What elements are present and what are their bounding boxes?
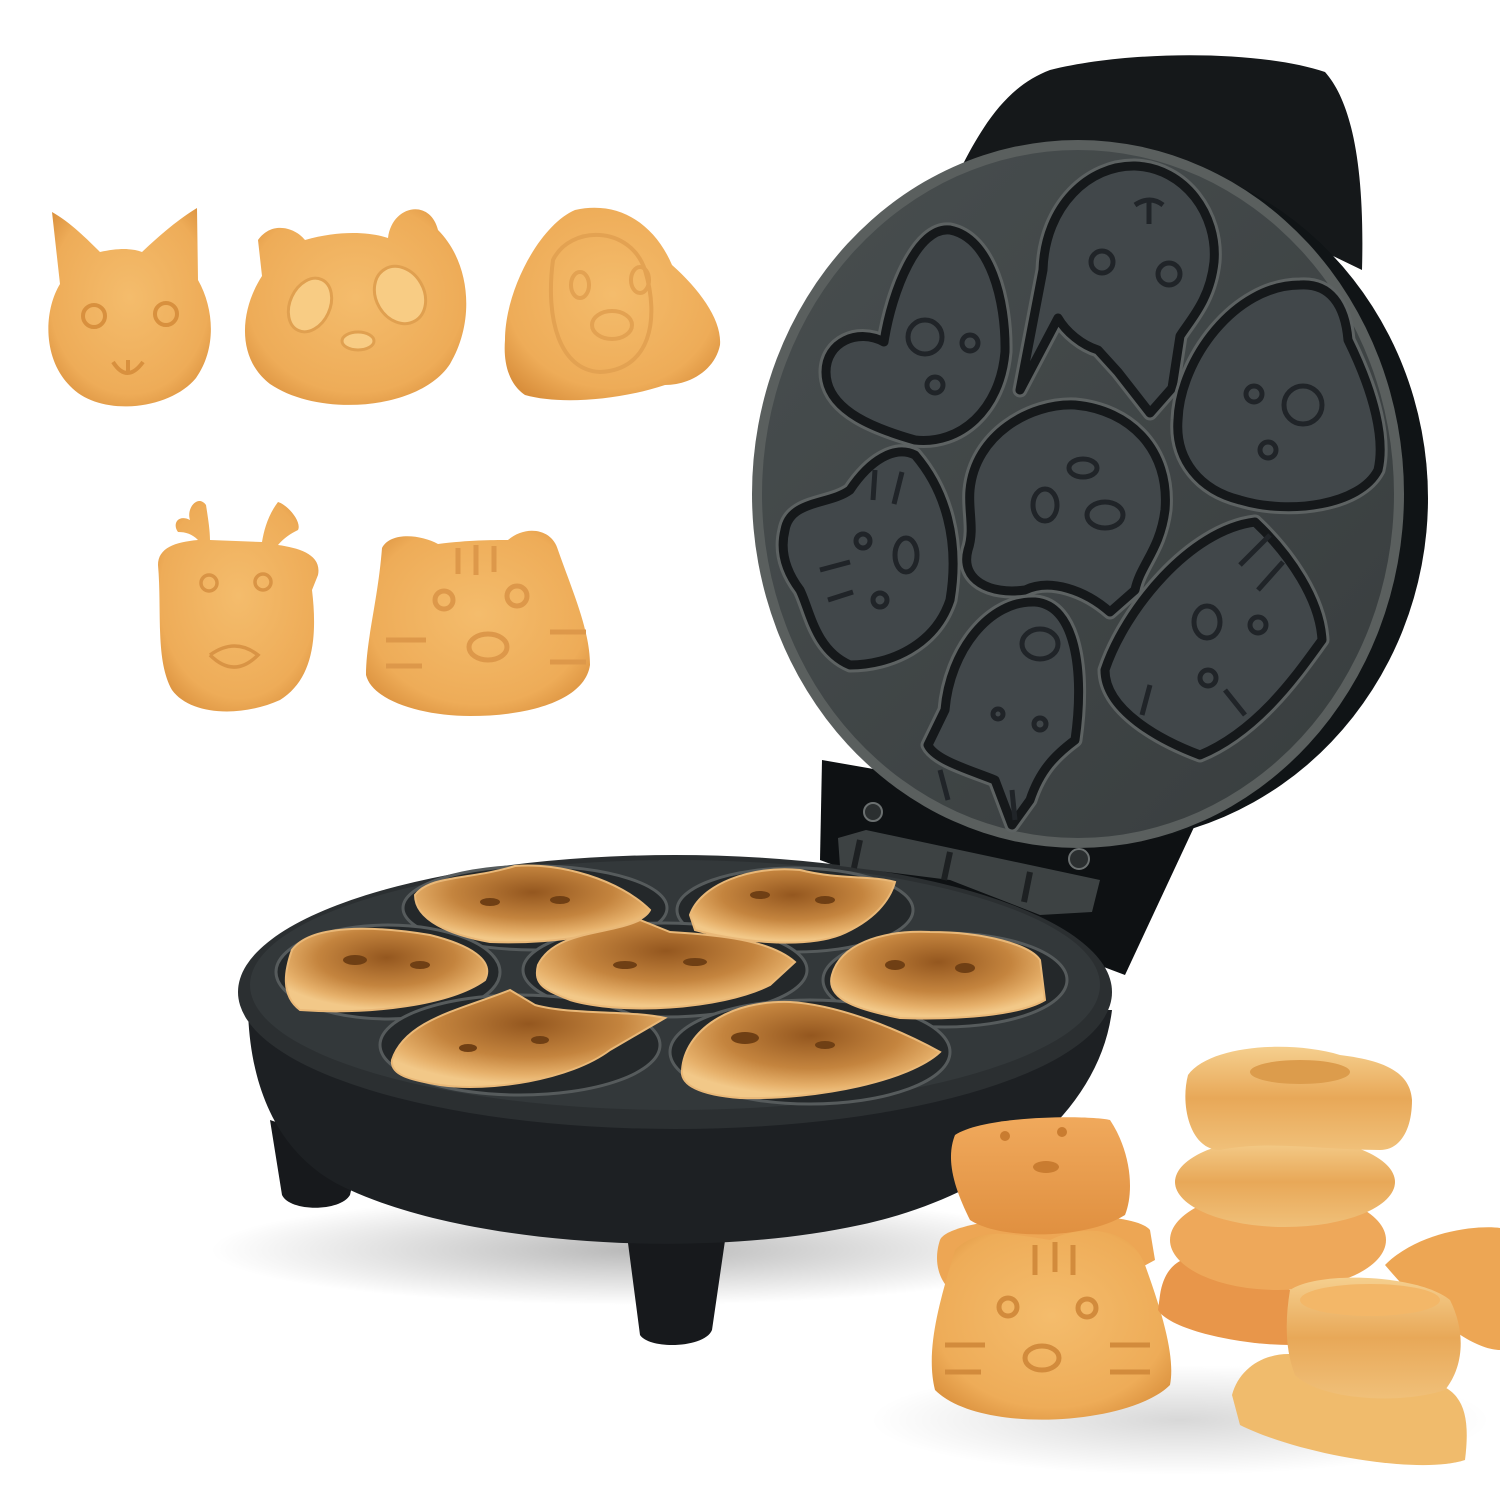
waffle in base 4 bbox=[537, 920, 795, 1008]
loose waffle: deer bbox=[158, 501, 318, 711]
waffle in base 3 bbox=[286, 929, 487, 1011]
waffle stack: far right bbox=[1385, 1227, 1500, 1350]
base plate rim bbox=[238, 855, 1112, 1129]
lid mould: tiger right bbox=[1105, 522, 1322, 755]
lid outer shell bbox=[768, 153, 1428, 843]
loose waffle: dog bbox=[505, 208, 720, 400]
loose waffle: tiger cat bbox=[366, 531, 590, 716]
lid handle bbox=[960, 55, 1362, 270]
waffle in base 1 bbox=[415, 865, 650, 942]
lid mould: bunny bbox=[826, 230, 1005, 440]
lid mould: panda right bbox=[1178, 285, 1380, 507]
loose waffle: panda bbox=[245, 209, 466, 405]
lid cooking plate bbox=[752, 140, 1404, 848]
hinge bbox=[838, 830, 1100, 915]
waffle stack: front left bbox=[932, 1117, 1171, 1420]
waffle stack: tall right bbox=[1158, 1047, 1412, 1345]
cooked waffles in base bbox=[286, 865, 1045, 1098]
loose waffle: cat bbox=[48, 208, 211, 406]
waffle maker lid bbox=[752, 55, 1428, 975]
lid mould: bottom deer bbox=[928, 602, 1079, 825]
waffle faces bbox=[343, 891, 975, 1052]
base feet bbox=[270, 1120, 728, 1345]
waffle in base 2 bbox=[690, 869, 895, 943]
base body bbox=[248, 1010, 1112, 1244]
waffle in base 5 bbox=[831, 932, 1045, 1018]
lid mould: centre bbox=[967, 405, 1165, 612]
lid mould: chick bbox=[1020, 166, 1214, 413]
waffle stack: small front right bbox=[1232, 1278, 1467, 1465]
lid mould: tiger left bbox=[783, 452, 953, 665]
waffle in base 7 bbox=[682, 1002, 940, 1098]
ground shadow bbox=[210, 1195, 1490, 1475]
hinge screws bbox=[864, 803, 1089, 869]
waffle in base 6 bbox=[392, 990, 665, 1087]
waffle maker base bbox=[238, 803, 1112, 1345]
lid hinge support bbox=[820, 760, 1195, 975]
lid mould details bbox=[820, 200, 1322, 820]
base wells bbox=[276, 866, 1067, 1104]
